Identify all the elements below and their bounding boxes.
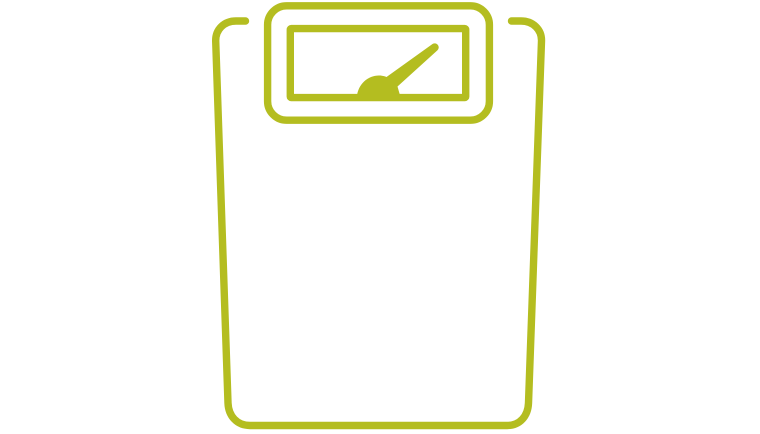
scale body outline	[216, 21, 542, 426]
dial needle	[357, 43, 439, 97]
dial window	[290, 29, 466, 98]
display housing	[268, 6, 489, 120]
